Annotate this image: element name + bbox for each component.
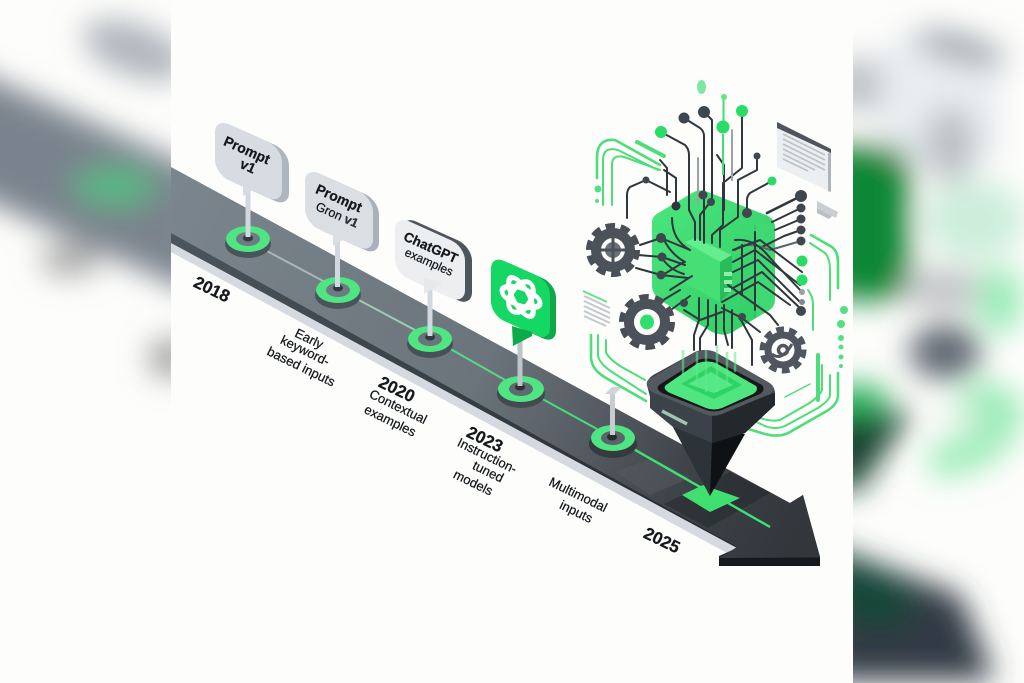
blurred left background panel (0, 0, 200, 683)
label: multimodal inputs: Multimodal (547, 474, 610, 515)
label: 2020 contextual examples: 2020 (376, 373, 418, 406)
speech bubble: green logo (491, 255, 556, 346)
milestone node ChatGPT examples (407, 288, 453, 358)
gear left (590, 227, 636, 273)
circuit wires (627, 111, 802, 365)
label: 2023 instruction-tuned models: models (451, 467, 496, 499)
translucent light beams (683, 345, 735, 392)
icon: small green dots (594, 186, 848, 368)
left document lines (583, 291, 610, 326)
central chip (685, 238, 732, 302)
label: multimodal inputs: inputs (557, 497, 596, 526)
speech bubble: Prompt v1 (215, 118, 289, 207)
icon: knot logo (502, 270, 540, 324)
green cube (652, 190, 775, 335)
speech bubble: ChatGPT examples: examples (403, 245, 455, 279)
label: 2023 instruction-tuned models: tuned (470, 458, 506, 485)
label: 2023 instruction-tuned models (451, 423, 519, 499)
milestone node 2023 (497, 340, 545, 408)
timeline road with arrow (171, 167, 820, 566)
timeline centre line (265, 250, 770, 527)
speech bubble: Prompt v1: v1 (238, 156, 259, 177)
speech bubble: ChatGPT examples: ChatGPT (401, 229, 461, 266)
label: 2020 contextual examples: examples (362, 402, 419, 440)
speech bubble: ChatGPT examples (395, 212, 472, 308)
target diamond under funnel (682, 485, 740, 512)
wire end dots (642, 106, 807, 321)
small grey tag (817, 201, 838, 219)
speech bubble: Prompt v1: Prompt (221, 133, 273, 167)
speech bubble: Prompt Gron v1 (305, 167, 379, 256)
speech bubble: Prompt Gron v1: Gron v1 (314, 199, 361, 231)
milestone node multimodal (589, 387, 637, 458)
label: 2018: 2018 (191, 273, 233, 306)
green circuit traces (591, 140, 838, 436)
gear middle (623, 298, 671, 346)
milestone node 2020 contextual (315, 240, 361, 309)
label: 2023 instruction-tuned models: Instruction- (455, 435, 519, 476)
label: early keyword-based inputs: keyword- (278, 332, 332, 369)
speech bubble: Prompt Gron v1: Prompt (313, 181, 365, 215)
window panel top right (777, 122, 831, 192)
label: 2025: 2025 (641, 524, 683, 557)
funnel device (647, 350, 775, 496)
green end dots (655, 80, 808, 286)
label: 2020 contextual examples (362, 373, 430, 440)
label: 2023 instruction-tuned models: 2023 (464, 423, 506, 456)
milestone node 2018 (225, 190, 271, 258)
central white panel (171, 0, 853, 683)
blurred right background panel (825, 0, 1024, 683)
label: 2020 contextual examples: Contextual (367, 386, 430, 427)
gear right (763, 330, 803, 370)
label: early keyword-based inputs: based inputs (265, 344, 338, 390)
label: early keyword-based inputs: Early (293, 325, 326, 352)
